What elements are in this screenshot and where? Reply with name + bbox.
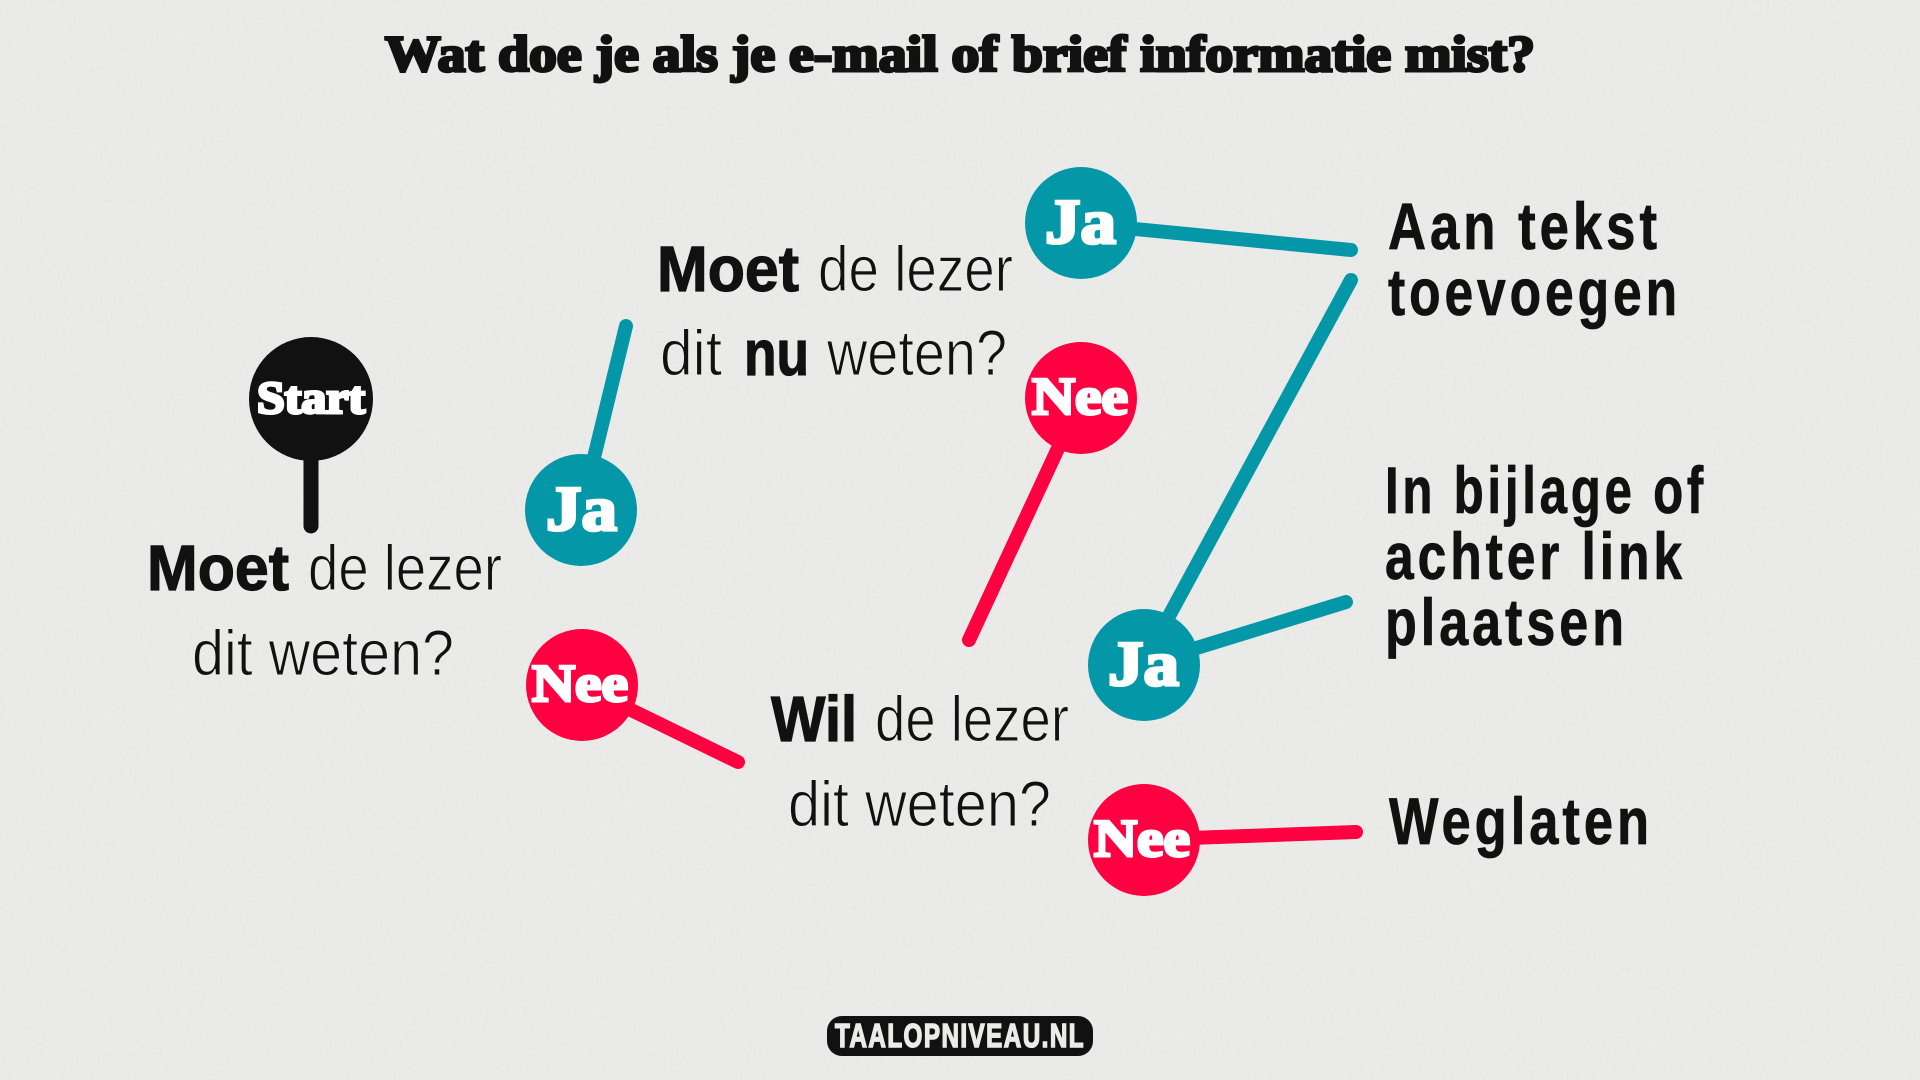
question 3: wil de lezer dit weten: Wil [771,683,857,755]
question 3: wil de lezer dit weten [771,683,1069,840]
answer: ja to both outcomes: Ja [1108,629,1179,699]
outcome: aan tekst toevoegen: Aan tekst [1388,189,1661,263]
outcome: aan tekst toevoegen [1388,189,1681,329]
outcome: in bijlage of achter link plaatsen: In bijlage of [1385,453,1707,527]
question 1: moet de lezer dit weten [147,532,502,689]
question 1: moet de lezer dit weten: Moet [147,532,289,604]
footer logo: taalopniveau.nl [827,1016,1093,1056]
answer: nee to question 3: Nee [532,655,628,713]
outcome: aan tekst toevoegen: toevoegen [1388,255,1681,329]
answer: nee to question 3 [969,342,1137,640]
outcome: in bijlage of achter link plaatsen: achter link [1385,519,1686,593]
question 2: moet de lezer dit nu weten: nu [744,317,809,389]
footer logo: taalopniveau.nl: TAALOPNIVEAU.NL [835,1017,1085,1054]
question 2: moet de lezer dit nu weten [657,233,1013,389]
outcome: in bijlage of achter link plaatsen: plaatsen [1385,585,1628,659]
title: Wat doe je als je e-mail of brief informatie mist? [385,27,1535,83]
answer: ja to aan tekst toevoegen: Ja [1045,187,1116,257]
question 3: wil de lezer dit weten: dit weten? [788,768,1051,840]
question 3: wil de lezer dit weten: de lezer [875,683,1069,755]
outcome: weglaten: Weglaten [1389,784,1653,858]
answer: nee to question 3: Nee [1032,368,1128,426]
answer: nee to weglaten [1088,784,1356,896]
question 1: moet de lezer dit weten: de lezer [308,532,502,604]
answer: ja to aan tekst toevoegen [1025,167,1351,279]
answer: nee to weglaten: Nee [1094,810,1190,868]
question 2: moet de lezer dit nu weten: dit [660,317,722,389]
answer: nee to question 3 [526,629,738,762]
answer: ja to both outcomes [1088,280,1351,721]
question 1: moet de lezer dit weten: dit weten? [192,617,454,689]
answer: ja to question 2: Ja [546,474,617,544]
start node [249,337,373,526]
start node: Start [257,373,365,423]
question 2: moet de lezer dit nu weten: de lezer [818,233,1013,305]
question 2: moet de lezer dit nu weten: Moet [657,233,799,305]
outcome: in bijlage of achter link plaatsen [1385,453,1707,659]
answer: ja to question 2 [525,326,637,566]
question 2: moet de lezer dit nu weten: weten? [826,317,1007,389]
